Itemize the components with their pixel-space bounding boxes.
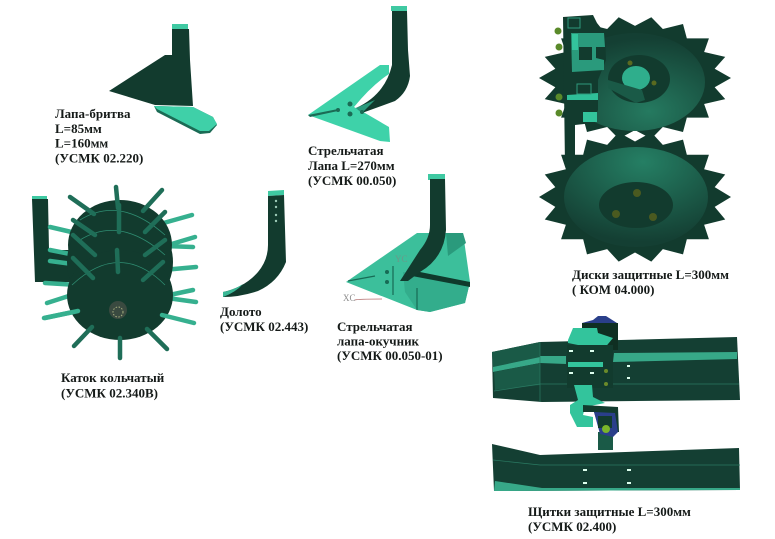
central bracket: [567, 316, 630, 450]
text: axis XC YC: YC: [395, 254, 408, 264]
label: ring roller: [61, 370, 165, 400]
label: hilling sweep: [337, 319, 443, 363]
label: protective shields: Щитки защитные L=300мм: [528, 504, 691, 519]
label: razor sweep: (УСМК 02.220): [55, 150, 143, 166]
label: protective discs: [572, 267, 729, 297]
label: arrow sweep: Стрельчатая: [308, 143, 384, 158]
part: razor sweep: [109, 24, 217, 134]
part: chisel: [223, 190, 286, 297]
label: razor sweep: L=160мм: [55, 136, 108, 150]
label: chisel: [220, 304, 308, 334]
bracket: [554, 15, 606, 165]
label: chisel: Долото: [220, 304, 262, 319]
label: protective discs: ( КОМ 04.000): [572, 282, 654, 297]
text: axis XC YC: XC: [343, 293, 356, 303]
label: razor sweep: L=85мм: [55, 121, 102, 136]
part: hilling sweep: [346, 174, 470, 312]
label: hilling sweep: лапа-окучник: [337, 334, 420, 348]
upper shield: [492, 337, 740, 402]
part: ring roller: [32, 187, 196, 358]
part: arrow sweep: [308, 6, 410, 142]
label: hilling sweep: Стрельчатая: [337, 319, 413, 334]
label: razor sweep: [55, 106, 143, 166]
label: arrow sweep: (УСМК 00.050): [308, 173, 396, 188]
text: axis XC YC: [343, 254, 408, 303]
label: razor sweep: Лапа-бритва: [55, 106, 131, 121]
part: protective shields: [492, 316, 740, 491]
label: arrow sweep: [308, 143, 396, 188]
label: ring roller: Каток кольчатый: [61, 370, 165, 385]
lower serrated disc: [539, 132, 731, 262]
label: protective shields: [528, 504, 691, 534]
label: hilling sweep: (УСМК 00.050-01): [337, 348, 443, 363]
part: protective discs: [539, 15, 731, 262]
lower shield: [492, 444, 740, 491]
label: arrow sweep: Лапа L=270мм: [308, 158, 395, 173]
label: ring roller: (УСМК 02.340В): [61, 386, 158, 400]
label: protective shields: (УСМК 02.400): [528, 519, 616, 534]
upper serrated disc: [539, 17, 731, 139]
label: chisel: (УСМК 02.443): [220, 319, 308, 334]
label: protective discs: Диски защитные L=300мм: [572, 267, 729, 282]
